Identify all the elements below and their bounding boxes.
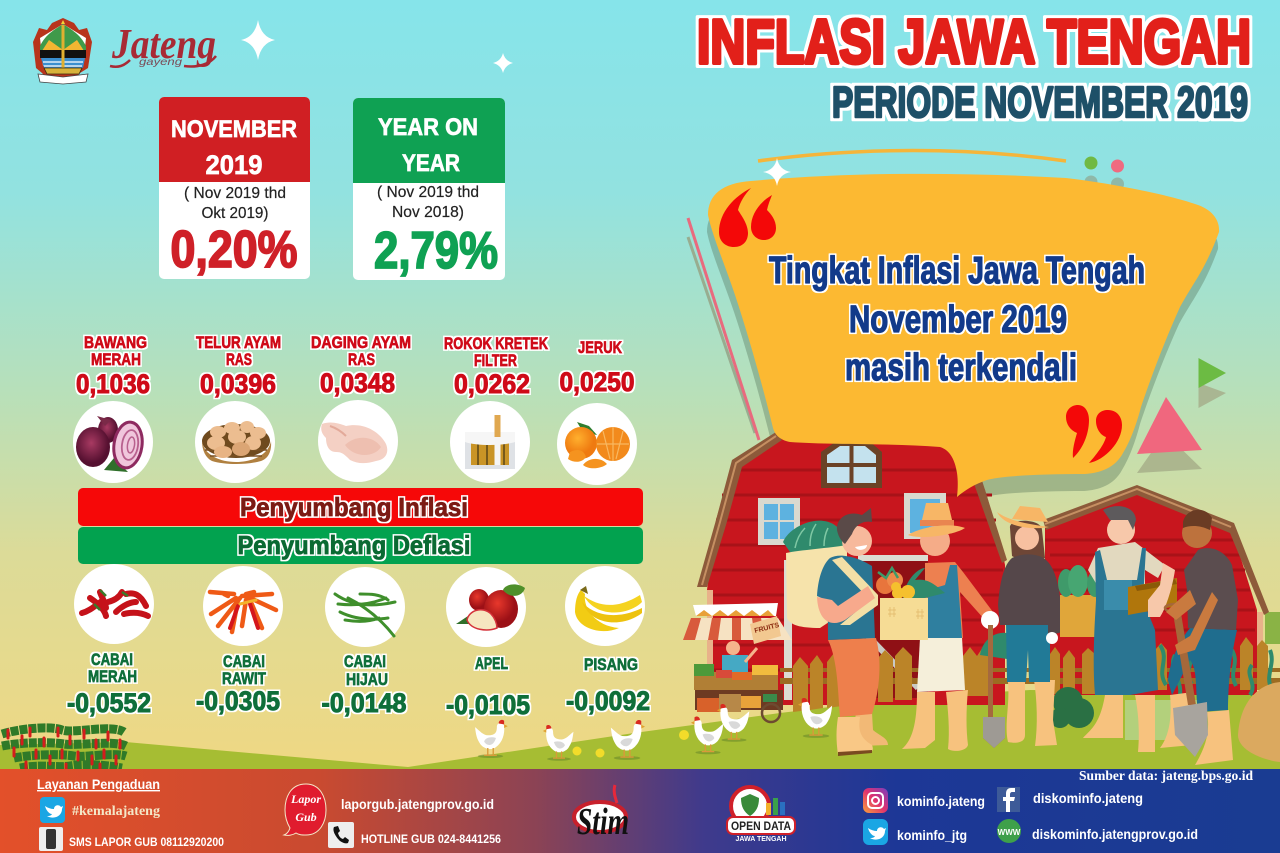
card: Year on Year bbox=[353, 98, 505, 280]
card: November 2019: ( Nov 2019 thd bbox=[184, 185, 286, 202]
item: apel bbox=[446, 567, 530, 720]
item: cabai merah: -0,0552 bbox=[67, 688, 151, 718]
hay bale bbox=[1238, 682, 1280, 762]
decorative triangles bbox=[1137, 358, 1226, 473]
corn plants bbox=[1160, 645, 1272, 700]
plant behind woman bbox=[980, 633, 1007, 659]
speech bubble bbox=[708, 174, 1219, 497]
chili plants bbox=[2, 728, 126, 772]
card: November 2019: Okt 2019) bbox=[202, 205, 268, 222]
item: daging ayam ras bbox=[311, 333, 411, 482]
person: man with hat bbox=[876, 503, 999, 751]
item: bawang merah: 0,1036 bbox=[76, 369, 150, 399]
speech bubble shadow bbox=[707, 191, 1218, 514]
decorative line: pink bbox=[688, 218, 759, 440]
inflation contributors bbox=[73, 333, 637, 485]
item: bawang merah: BAWANG bbox=[84, 333, 147, 352]
item: cabai hijau: -0,0148 bbox=[322, 688, 406, 718]
item: apel: -0,0105 bbox=[446, 690, 530, 720]
item: rokok kretek filter: FILTER bbox=[474, 351, 517, 370]
social media: diskominfo.jateng bbox=[1033, 791, 1143, 806]
decorative line: yellow bbox=[758, 150, 1066, 161]
item: bawang merah bbox=[73, 333, 153, 483]
item: daging ayam ras: RAS bbox=[348, 350, 375, 369]
star bbox=[763, 158, 791, 186]
item: cabai rawit bbox=[196, 566, 283, 716]
person: man with sack bbox=[783, 508, 888, 756]
item: telur ayam ras: TELUR AYAM bbox=[196, 333, 281, 352]
source note: Sumber data: jateng.bps.go.id bbox=[1079, 768, 1253, 783]
card: Year on Year: Nov 2018) bbox=[392, 204, 464, 221]
complaint services bbox=[37, 776, 224, 851]
card: Year on Year: YEAR ON bbox=[378, 114, 478, 141]
item: cabai merah bbox=[67, 564, 154, 718]
logo: Jawa Tengah emblem bbox=[33, 18, 92, 84]
box with greens bbox=[1058, 565, 1103, 637]
deflation contributors bbox=[67, 564, 650, 720]
item: pisang bbox=[565, 566, 650, 716]
bar: penyumbang inflasi: Penyumbang Inflasi bbox=[240, 492, 468, 522]
lapor gub: HOTLINE GUB 024-8441256 bbox=[361, 832, 501, 846]
item: cabai hijau: CABAI bbox=[344, 652, 386, 671]
item: rokok kretek filter bbox=[444, 334, 549, 483]
item: cabai rawit: CABAI bbox=[223, 652, 265, 671]
bubble text: masih terkendali bbox=[845, 347, 1077, 389]
item: telur ayam ras: 0,0396 bbox=[200, 369, 276, 399]
decorative stars bbox=[241, 20, 513, 73]
person: woman bbox=[997, 506, 1062, 746]
card: Year on Year: ( Nov 2019 thd bbox=[377, 184, 479, 201]
item: telur ayam ras bbox=[195, 333, 281, 483]
card: Year on Year: YEAR bbox=[402, 150, 460, 177]
logo: Stim bbox=[574, 785, 629, 843]
logo: Jateng Gayeng: Jateng bbox=[111, 22, 216, 68]
complaint services: Layanan Pengaduan bbox=[37, 776, 160, 792]
item: jeruk: JERUK bbox=[578, 338, 623, 357]
item: bawang merah: MERAH bbox=[91, 350, 141, 369]
item: cabai rawit: RAWIT bbox=[222, 669, 266, 688]
barn: right bbox=[1043, 485, 1280, 695]
item: daging ayam ras: DAGING AYAM bbox=[311, 333, 411, 352]
complaint services: SMS LAPOR GUB 08112920200 bbox=[69, 835, 224, 849]
social media: kominfo.jateng bbox=[897, 794, 985, 809]
card: November 2019: 2019 bbox=[206, 150, 262, 180]
logo: Jateng Gayeng: gayeng bbox=[139, 56, 182, 68]
watermelons bbox=[1050, 687, 1094, 728]
social media: WWW bbox=[998, 828, 1021, 837]
logo: Open Data: OPEN DATA bbox=[731, 819, 791, 833]
bubble text bbox=[769, 250, 1145, 389]
item: daging ayam ras: 0,0348 bbox=[320, 368, 395, 398]
person: man with shovel bbox=[1160, 510, 1238, 765]
social media bbox=[863, 787, 1198, 845]
bar: penyumbang deflasi bbox=[78, 527, 643, 564]
person: man with apron bbox=[1083, 506, 1177, 752]
logo: Stim: Stim bbox=[577, 801, 629, 843]
quote mark: open bbox=[719, 188, 776, 247]
bubble text: November 2019 bbox=[849, 299, 1067, 341]
item: cabai hijau: HIJAU bbox=[346, 670, 388, 689]
quote mark: close bbox=[1066, 405, 1122, 463]
bar: penyumbang deflasi: Penyumbang Deflasi bbox=[238, 530, 470, 560]
bubble text: Tingkat Inflasi Jawa Tengah bbox=[769, 250, 1145, 292]
logo: Open Data bbox=[727, 787, 795, 843]
item: cabai merah: CABAI bbox=[91, 650, 133, 669]
complaint services: #kemalajateng bbox=[72, 804, 160, 819]
item: cabai rawit: -0,0305 bbox=[196, 686, 280, 716]
item: pisang: -0,0092 bbox=[566, 686, 650, 716]
item: telur ayam ras: RAS bbox=[226, 350, 252, 369]
item: rokok kretek filter: 0,0262 bbox=[454, 369, 530, 399]
card: November 2019: 0,20% bbox=[170, 221, 298, 279]
lapor gub: laporgub.jatengprov.go.id bbox=[341, 796, 494, 812]
item: rokok kretek filter: ROKOK KRETEK bbox=[444, 334, 549, 353]
card: November 2019 bbox=[159, 97, 310, 279]
item: jeruk: 0,0250 bbox=[560, 367, 634, 397]
card: Year on Year: 2,79% bbox=[374, 222, 498, 280]
decorative line: sage bbox=[688, 237, 755, 433]
ground hill bbox=[0, 690, 1280, 769]
market stall: FRUITS bbox=[754, 622, 780, 635]
chickens bbox=[475, 698, 832, 761]
footer band bbox=[0, 769, 1280, 853]
barn: left bbox=[697, 432, 1007, 705]
shovel 1 bbox=[983, 625, 1005, 748]
logo: Open Data: JAWA TENGAH bbox=[735, 836, 787, 843]
market stall bbox=[683, 603, 792, 722]
decorative dots bbox=[1084, 156, 1124, 190]
item: cabai merah: MERAH bbox=[88, 667, 137, 686]
lapor gub bbox=[284, 784, 501, 848]
social media: diskominfo.jatengprov.go.id bbox=[1032, 827, 1198, 842]
bar: penyumbang inflasi bbox=[78, 488, 643, 526]
social media: kominfo_jtg bbox=[897, 828, 967, 843]
item: jeruk bbox=[557, 338, 637, 485]
lapor gub: Lapor bbox=[290, 792, 321, 806]
item: apel: APEL bbox=[475, 654, 508, 673]
lapor gub: Gub bbox=[295, 810, 317, 824]
fence bbox=[780, 637, 1280, 712]
card: November 2019: NOVEMBER bbox=[171, 116, 297, 143]
item: pisang: PISANG bbox=[584, 655, 638, 674]
item: cabai hijau bbox=[322, 567, 406, 718]
